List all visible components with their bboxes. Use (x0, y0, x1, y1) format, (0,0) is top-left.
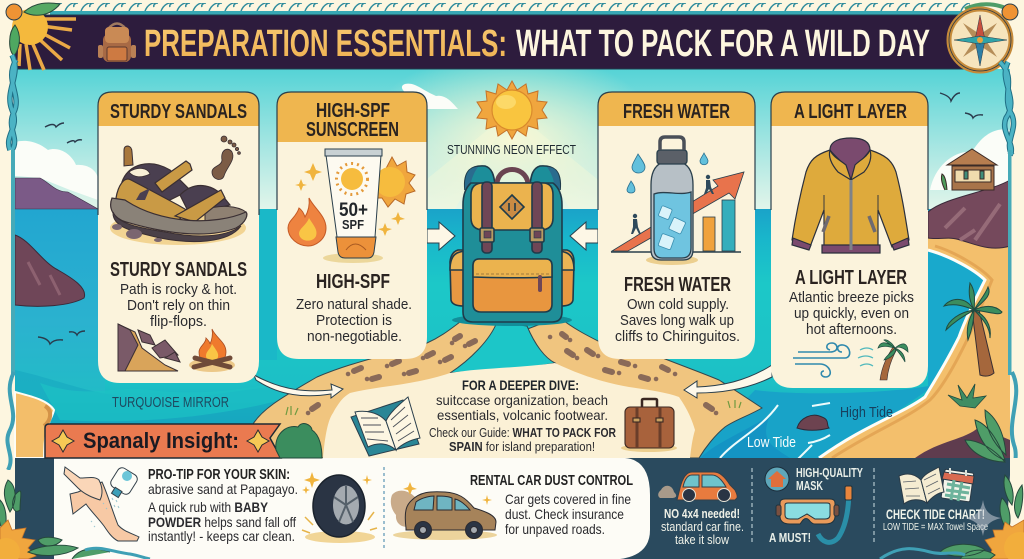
sea rock and foam (797, 415, 829, 430)
right beach (819, 238, 1010, 458)
spanaly insight tag: Spanaly Insight: (83, 428, 239, 453)
arrow: sandals to trail (254, 375, 343, 398)
diamond badge (500, 195, 524, 219)
heading: HIGH-SPF (316, 100, 390, 122)
white tips panel (54, 458, 650, 559)
icon: growth arrow and bars (611, 172, 744, 252)
sparkle watermark (965, 500, 1001, 536)
body text: Atlantic breeze picks (789, 289, 914, 306)
deep-dive text: essentials, volcanic footwear. (437, 407, 608, 423)
heading: A LIGHT LAYER (794, 101, 907, 123)
sandy path and deep-dive area (253, 317, 762, 458)
icon: campfire (189, 329, 235, 372)
rental car text: for unpaved roads. (505, 521, 605, 537)
icon: cliff-top hut (941, 149, 997, 190)
right cliff (928, 180, 1010, 248)
birds right (940, 93, 983, 118)
main body (463, 183, 562, 322)
body text: Own cold supply. (627, 296, 729, 313)
icon: sun above backpack (477, 81, 547, 139)
small shore plant (948, 384, 986, 408)
pebbles (112, 224, 162, 242)
header band (6, 3, 965, 70)
no 4x4 text (661, 506, 744, 547)
top wave border (50, 3, 970, 15)
icon: suitcase (621, 399, 677, 452)
body text: Zero natural shade. (296, 296, 412, 313)
no 4x4 text: standard car fine. (661, 519, 744, 534)
bush (276, 424, 322, 458)
pull tab (124, 146, 133, 166)
card 3: fresh water (598, 92, 755, 359)
no 4x4 text: NO 4x4 needed! (664, 506, 740, 521)
pro-tip text (148, 467, 298, 544)
deep-dive block (351, 377, 677, 456)
deep-dive text: FOR A DEEPER DIVE: (462, 377, 579, 393)
high-quality mask text (796, 466, 863, 493)
body text: cliffs to Chiringuitos. (615, 328, 740, 345)
icon: compass (949, 4, 1018, 71)
icon: orange car (658, 472, 737, 502)
pro-tip text: POWDER helps sand fall off (148, 514, 296, 530)
card 4: a light layer (771, 92, 928, 388)
dashed dividers (752, 468, 874, 544)
heading (306, 100, 399, 141)
arrow: light layer to trail (684, 365, 772, 398)
icon: book and calendar (899, 467, 974, 504)
deep-dive text: SPAIN for island preparation! (449, 440, 595, 454)
body text: Path is rocky & hot. (120, 281, 237, 298)
high-quality mask text: HIGH-QUALITY (796, 466, 863, 480)
spf label (339, 200, 368, 232)
icon: header backpack (98, 24, 136, 62)
rope left (7, 55, 16, 470)
icon: wind (793, 343, 850, 377)
body text (789, 289, 914, 338)
body text: Saves long walk up (620, 312, 734, 329)
tide labels: High Tide (840, 405, 893, 421)
cloud left (15, 141, 98, 200)
inner straps dark (122, 164, 190, 205)
icon: sparkles (295, 163, 405, 236)
foliage bottom left (0, 470, 150, 559)
label: STURDY SANDALS (110, 259, 247, 281)
icon: hikers (631, 175, 714, 234)
body text: hot afternoons. (806, 321, 897, 338)
footbed (205, 206, 246, 223)
icon: beach palm (944, 283, 1002, 376)
cloud behind card 2 (402, 84, 458, 109)
icon: small palm (858, 340, 908, 380)
icon: backpack (450, 166, 574, 326)
pro-tip text: abrasive sand at Papagayo. (148, 481, 298, 497)
rope right (1000, 62, 1016, 495)
pro-tip text: PRO-TIP FOR YOUR SKIN: (148, 467, 290, 483)
icon: footprint (212, 136, 240, 179)
deep-dive text: Check our Guide: WHAT TO PACK FOR (429, 426, 616, 440)
high-quality mask text: MASK (796, 479, 823, 493)
body text: up quickly, even on (794, 305, 909, 322)
tide chart text: LOW TIDE = MAX Towel Space (883, 522, 988, 533)
heading: FRESH WATER (623, 101, 730, 123)
tide chart text: CHECK TIDE CHART! (886, 507, 985, 522)
corner sun (6, 3, 76, 70)
spf label: 50+ (339, 200, 368, 221)
heading: STURDY SANDALS (110, 101, 247, 123)
icon: open book (351, 397, 420, 456)
no 4x4 text: take it slow (675, 532, 730, 547)
label: A LIGHT LAYER (795, 267, 907, 289)
icon: sunscreen tube (323, 149, 383, 263)
shoulder straps (465, 166, 495, 190)
icon: sandal (110, 146, 247, 245)
icon: water bottle (646, 137, 698, 265)
deep-dive text: suitccase organization, beach (436, 392, 608, 408)
tide chart text (883, 507, 988, 533)
body text: flip-flops. (150, 313, 207, 330)
body text (296, 296, 412, 345)
beach left (15, 392, 54, 458)
card 2: high-spf sunscreen (277, 92, 427, 359)
icon: rocky path (118, 324, 180, 371)
rental car text (470, 473, 633, 537)
bottom band (15, 458, 1010, 559)
arrow: sunscreen to backpack (427, 222, 455, 250)
icon: diving mask and snorkel (776, 486, 852, 542)
icon: tire (302, 472, 377, 543)
label: HIGH-SPF (316, 271, 390, 293)
heading: SUNSCREEN (306, 119, 399, 141)
stunning neon effect label: STUNNING NEON EFFECT (447, 142, 576, 157)
pro-tip text: instantly! - keeps car clean. (148, 528, 295, 544)
cloud right (930, 129, 1010, 190)
icon: water drops (627, 153, 708, 193)
body text: Protection is (316, 312, 392, 329)
icon: house badge (765, 467, 789, 491)
title (144, 23, 930, 65)
scene: sky, sea and coast (15, 50, 1010, 462)
icon: flame (288, 198, 326, 246)
body text: non-negotiable. (307, 328, 402, 345)
tide labels: Low Tide (747, 435, 796, 451)
deep-dive text (429, 377, 616, 454)
handle (497, 170, 528, 183)
birds left (38, 123, 85, 344)
side pockets (450, 250, 464, 306)
far hill left (15, 178, 98, 209)
front pocket (473, 259, 552, 312)
rental car text: Car gets covered in fine (505, 491, 631, 507)
cliff left (15, 235, 85, 306)
label: FRESH WATER (624, 274, 731, 296)
turquoise mirror label: TURQUOISE MIRROR (112, 394, 229, 411)
body text (120, 281, 237, 330)
tan upper (116, 179, 190, 222)
card 1: sturdy sandals (98, 92, 259, 383)
spanaly insight tag (45, 424, 281, 458)
icon: sun behind tube (372, 157, 415, 207)
icon: dusty car (391, 482, 497, 540)
top flap (471, 183, 553, 230)
rental car text: dust. Check insurance (505, 506, 624, 522)
pro-tip text: A quick rub with BABY (148, 499, 269, 515)
body text: Don't rely on thin (127, 297, 230, 314)
divider (383, 467, 385, 550)
title: PREPARATION ESSENTIALS: (144, 23, 507, 65)
tide labels (747, 405, 893, 451)
icon: leg and powder (64, 466, 139, 541)
straps and buckles (482, 182, 492, 253)
dark rock right (915, 427, 1010, 458)
arrow: water to backpack (570, 222, 598, 250)
foliage bottom right (880, 410, 1024, 559)
body text (615, 296, 740, 345)
sole (111, 198, 247, 234)
a must label: A MUST! (769, 530, 811, 545)
icon: jacket (792, 138, 909, 253)
rental car text: RENTAL CAR DUST CONTROL (470, 473, 633, 489)
spf label: SPF (342, 217, 364, 232)
